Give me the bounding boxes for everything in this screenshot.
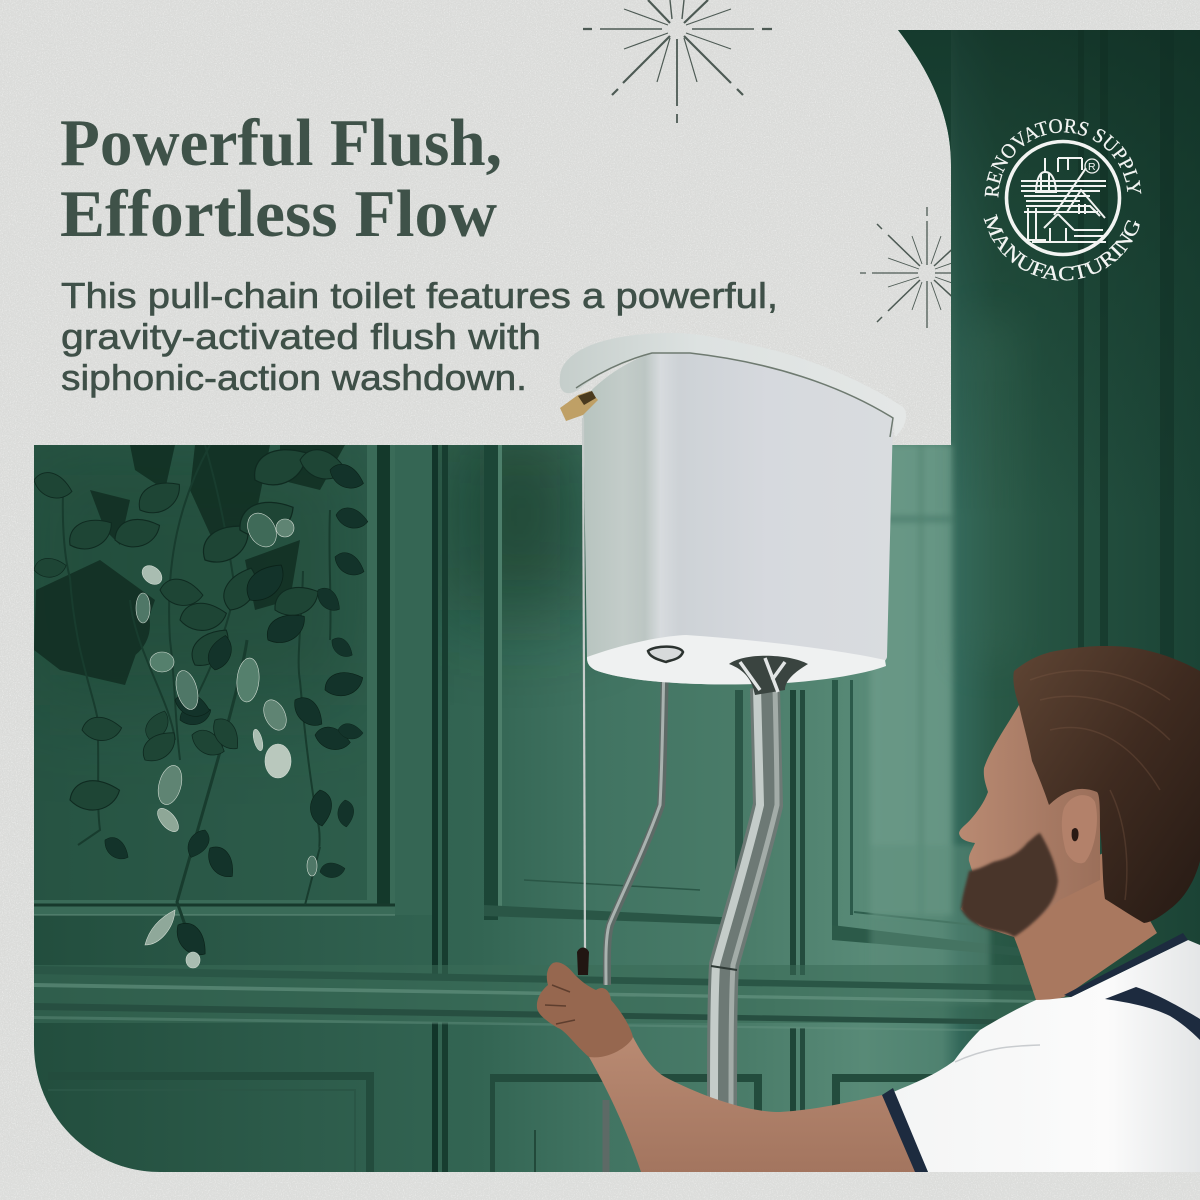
dark leaves: [100, 460, 370, 962]
hair strands: [1030, 670, 1170, 900]
hand: [537, 962, 633, 1057]
body text: [61, 275, 778, 398]
tank outlet fitting large: [729, 656, 808, 695]
illustration: man: [537, 646, 1200, 1172]
body text: siphonic-action washdown.: [61, 357, 527, 398]
arm: [589, 1037, 920, 1172]
illustration: main flush pipe: [711, 688, 777, 1122]
dark foliage mass: [34, 445, 345, 685]
hair: [1013, 646, 1200, 923]
sleeve band: [882, 1088, 928, 1172]
illustration: cistern tank: [560, 333, 906, 695]
face: [959, 705, 1100, 937]
logo house: [1021, 158, 1106, 242]
decorative star: side: [860, 207, 960, 328]
plant vines: [63, 445, 331, 925]
upper dark corner: [898, 30, 951, 164]
title: Effortless Flow: [60, 177, 498, 251]
dado rail: [34, 965, 1044, 1032]
chain handle: [577, 948, 589, 975]
beard: [961, 833, 1058, 937]
shade above pipework left of tank: [450, 420, 590, 610]
tank rim: [560, 333, 906, 437]
illustration: trailing plant: [30, 439, 370, 968]
title: Powerful Flush,: [60, 106, 502, 180]
tank rim line: [576, 353, 893, 437]
logo registered mark: R: [1088, 161, 1096, 173]
tank body: [583, 353, 893, 684]
illustration: flush pipe, thin: [606, 660, 665, 1172]
logo: Renovators Supply Manufacturing: [984, 118, 1142, 281]
shirt: [893, 940, 1200, 1172]
logo ring: [1006, 142, 1120, 254]
mid-tone leaves: [30, 439, 349, 813]
illustration: pull chain: [577, 418, 589, 975]
right-hand dark panelling stripes: [1078, 137, 1174, 658]
ear: [1062, 795, 1097, 863]
lower wall panels: [156, 1072, 933, 1172]
tank base: [587, 635, 886, 684]
body text: This pull-chain toilet features a powerful,: [61, 275, 778, 316]
shirt fold: [955, 1045, 1040, 1062]
pale variegated leaves: [136, 508, 317, 968]
collar: [1064, 933, 1188, 997]
logo registered mark: [1085, 159, 1099, 173]
logo wordmark bottom: MANUFACTURING: [984, 214, 1140, 281]
body text: gravity-activated flush with: [61, 316, 541, 357]
panel mouldings: left: [34, 445, 432, 916]
illustration: brass lever: [560, 391, 598, 421]
panel mouldings: vertical grooves: [432, 445, 853, 1172]
bottom cream strip: [0, 1172, 1200, 1200]
soft light column right of centre: [965, 320, 1015, 660]
shoulder strap: [1105, 987, 1200, 1040]
dark left shade: [166, 482, 334, 676]
upper dark wall panel: [951, 30, 1200, 442]
tank outlet fitting small: [648, 647, 683, 662]
logo wordmark top: RENOVATORS SUPPLY: [984, 118, 1142, 198]
window light on wall: [870, 445, 990, 1005]
title: [60, 106, 502, 251]
decorative star: top: [583, 0, 772, 123]
neck: [1014, 854, 1157, 1000]
panel mouldings: horizontal bottoms: [484, 879, 963, 950]
